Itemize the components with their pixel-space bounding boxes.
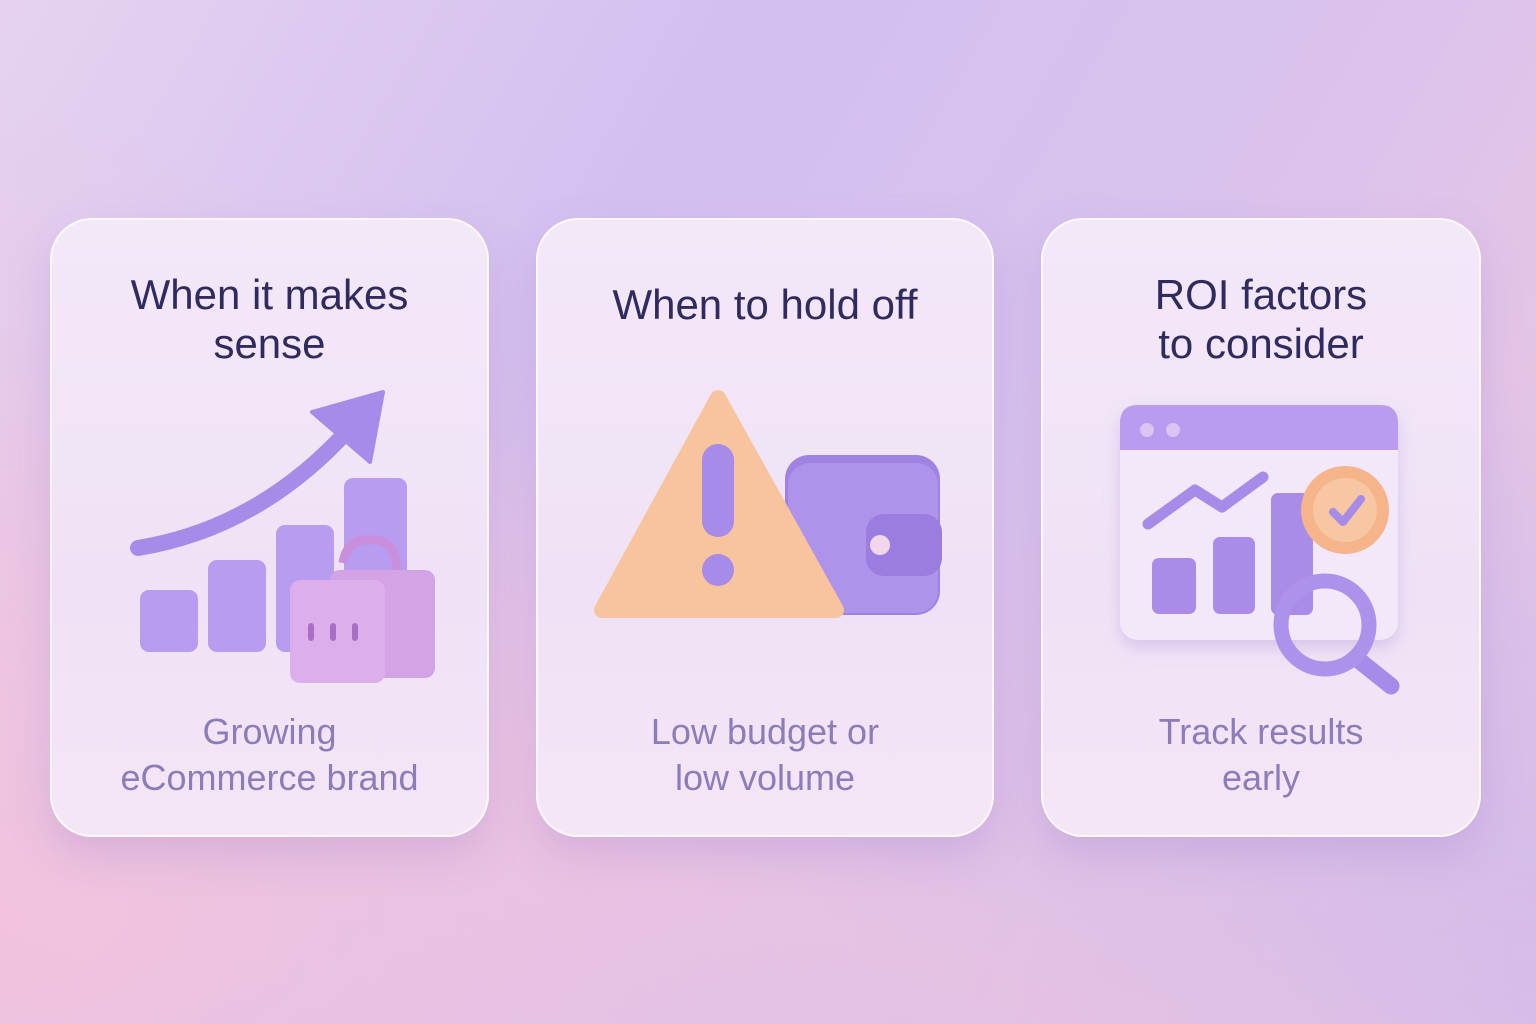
heading: ROI factors to consider	[1155, 271, 1367, 367]
heading: ROI factors to consider: ROI factors	[1155, 271, 1367, 318]
icon: growth chart with shopping bags	[130, 390, 435, 683]
caption: track results early: Track results	[1159, 711, 1363, 752]
caption: growing eCommerce brand	[120, 711, 419, 798]
panel: ROI factors to consider	[1041, 218, 1481, 837]
heading: ROI factors to consider: to consider	[1158, 320, 1364, 367]
caption: low budget or low volume: Low budget or	[651, 711, 879, 752]
heading: when it makes sense: When it makes	[131, 271, 408, 318]
caption: low budget or low volume: low volume	[675, 757, 855, 798]
caption: track results early	[1159, 711, 1363, 798]
caption: track results early: early	[1222, 757, 1300, 798]
caption: growing eCommerce brand: Growing	[202, 711, 337, 752]
heading: when to hold off: When to hold off	[612, 281, 918, 328]
panel: when to hold off	[536, 218, 994, 837]
caption: low budget or low volume	[651, 711, 879, 798]
icon: browser dashboard with magnifier and check badge	[1116, 405, 1402, 694]
heading: when it makes sense: sense	[213, 320, 326, 367]
caption: growing eCommerce brand: eCommerce brand	[120, 757, 419, 798]
heading: when it makes sense	[130, 271, 408, 367]
panel: when it makes sense	[50, 218, 489, 837]
icon: warning triangle and wallet	[594, 390, 942, 618]
